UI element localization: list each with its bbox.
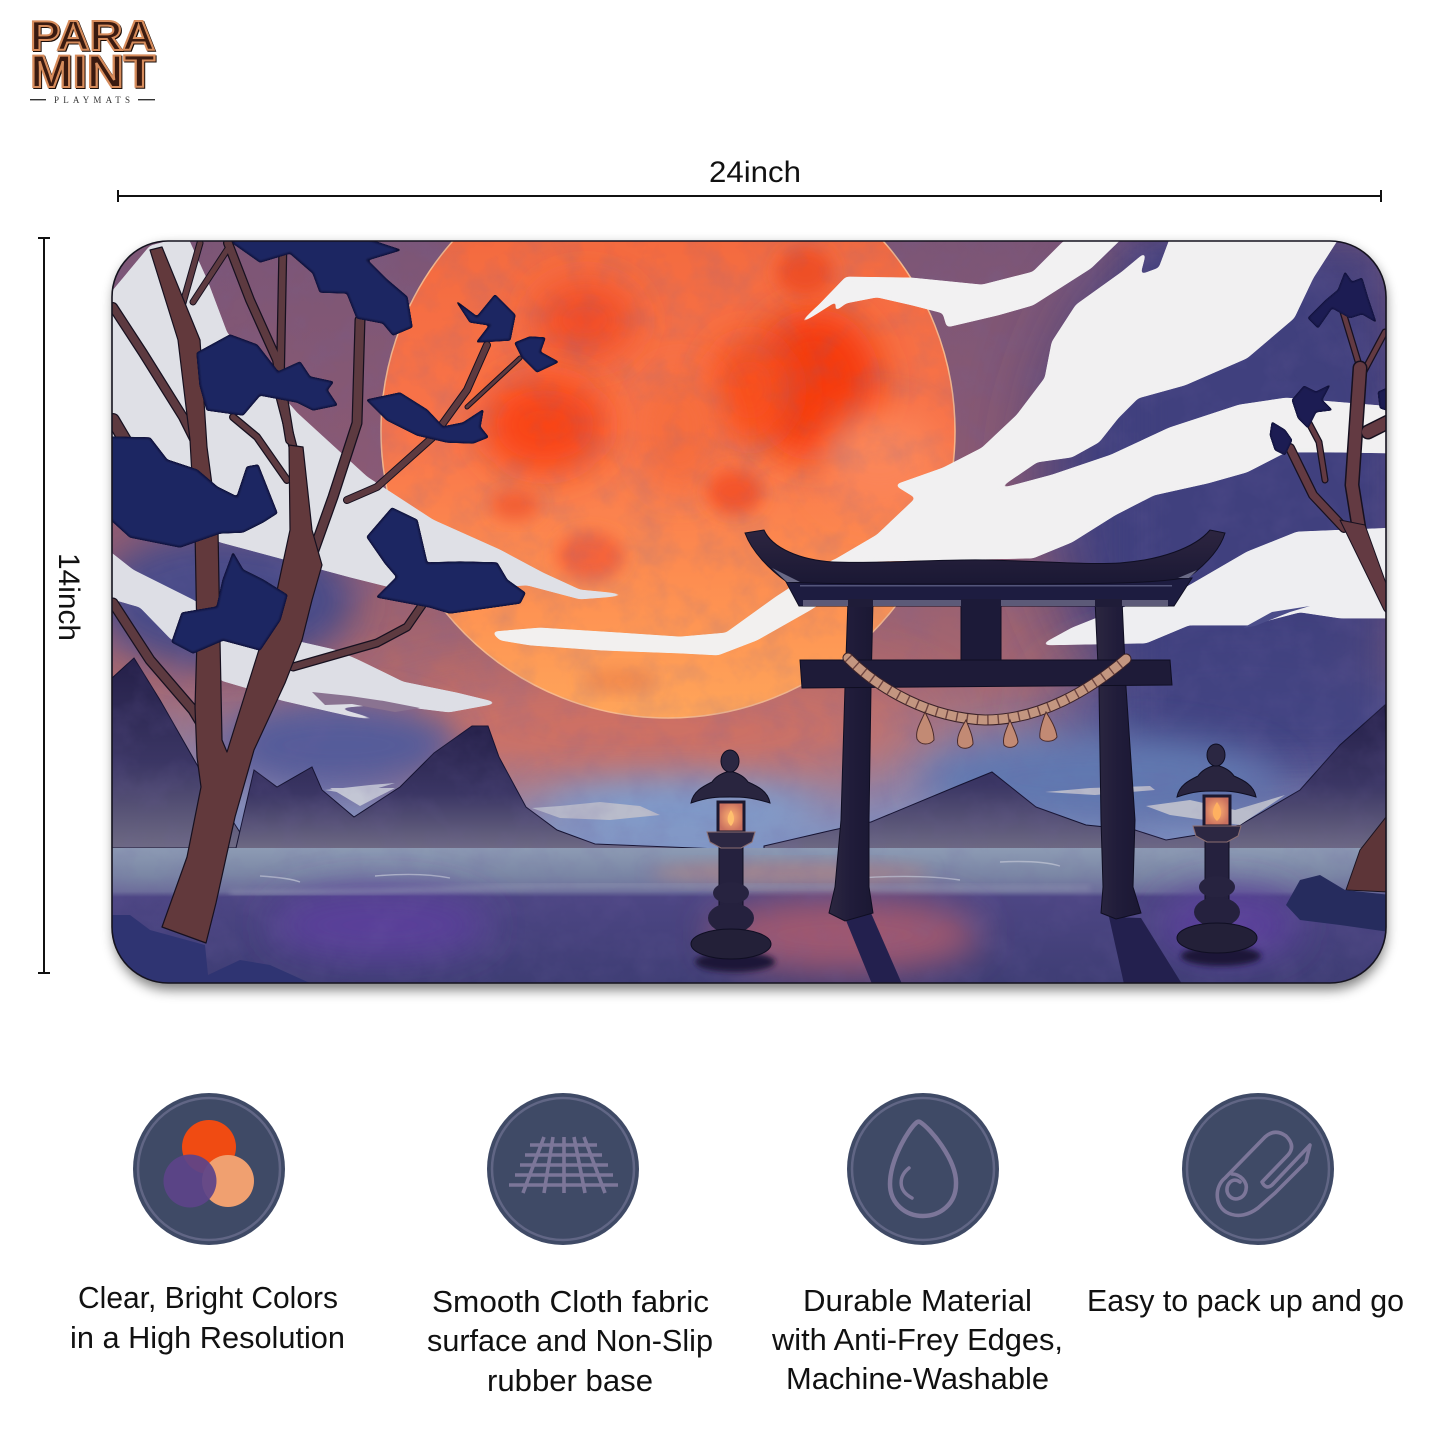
mat drop shadow (114, 246, 1386, 990)
right tree base (1340, 520, 1386, 612)
tree outline (113, 241, 520, 730)
height dimension: 14inch: 14inch (52, 553, 85, 641)
feature 4: portable (1087, 1093, 1404, 1318)
cloud: lower left strip (105, 548, 498, 724)
icon: color circles (133, 1093, 285, 1245)
cloud: lower right (1041, 528, 1395, 645)
icon: water drop (847, 1093, 999, 1245)
right tree (1290, 302, 1392, 892)
torii left pillar (829, 600, 873, 921)
cloud: large right sweep (831, 236, 1395, 562)
cloud: left diagonal band (105, 236, 632, 599)
moon (380, 242, 956, 719)
bottom-right rock (1286, 875, 1390, 932)
torii center tablet (960, 606, 1002, 660)
logo: Paramint Playmats: PLAYMATS (54, 95, 130, 105)
trunk at lower right (1346, 817, 1386, 892)
feature text: durable: Durable Material (803, 1283, 1032, 1318)
feature text: fabric: Smooth Cloth fabric (432, 1284, 709, 1319)
height dimension: 14inch (38, 238, 85, 973)
lantern: right (1177, 744, 1261, 966)
tree branches (113, 241, 520, 730)
water (112, 848, 1386, 984)
logo: Paramint Playmats: PARA (30, 12, 155, 59)
cloud: band across moon (492, 560, 880, 655)
feature 2: fabric (427, 1093, 713, 1398)
logo: Paramint Playmats: MINT (30, 46, 155, 97)
torii roof (745, 530, 1225, 584)
cloud: upper arm (804, 242, 1119, 326)
feature text: fabric: rubber base (487, 1363, 653, 1398)
foliage: left tree (108, 240, 558, 653)
distant clouds (325, 783, 1285, 825)
sky background (95, 220, 1445, 851)
main trunk (150, 247, 322, 943)
feature text: portable: Easy to pack up and go (1087, 1283, 1404, 1318)
torii shadows (845, 913, 1182, 984)
feature text: colors: Clear, Bright Colors (78, 1280, 338, 1315)
watercolor mottling (116, 242, 1385, 880)
logo: Paramint Playmats (30, 12, 155, 105)
wisp in right sky (1243, 606, 1310, 628)
feature 3: durable (771, 1093, 1063, 1396)
feature text: durable (771, 1283, 1063, 1396)
clouds (105, 236, 1395, 724)
mountains (112, 658, 1390, 850)
mat outline (112, 241, 1386, 983)
feature text: fabric: surface and Non-Slip (427, 1323, 713, 1358)
torii tie beam (800, 660, 1172, 688)
rope tassels (917, 712, 1057, 748)
cloud wisp: mauve inner strip (312, 692, 420, 712)
torii right pillar (1095, 600, 1141, 919)
icon: rolled mat (1182, 1093, 1334, 1245)
feature text: colors: in a High Resolution (70, 1320, 345, 1355)
feature 1: colors (70, 1093, 345, 1355)
bottom-left rocks (112, 915, 312, 984)
torii upper tier (784, 578, 1192, 606)
feature text: durable: with Anti-Frey Edges, (771, 1322, 1063, 1357)
feature text: colors (70, 1280, 345, 1355)
width dimension: 24inch (118, 156, 1381, 202)
feature text: durable: Machine-Washable (786, 1361, 1049, 1396)
shimenawa rope (848, 658, 1126, 720)
width dimension: 24inch: 24inch (709, 156, 801, 189)
lantern: left (691, 750, 775, 972)
torii gate (745, 530, 1225, 921)
playmat artwork (112, 242, 1386, 982)
left tree (113, 241, 520, 943)
foliage: right tree (1270, 272, 1392, 455)
icon: fabric weave (487, 1093, 639, 1245)
feature text: fabric (427, 1284, 713, 1398)
